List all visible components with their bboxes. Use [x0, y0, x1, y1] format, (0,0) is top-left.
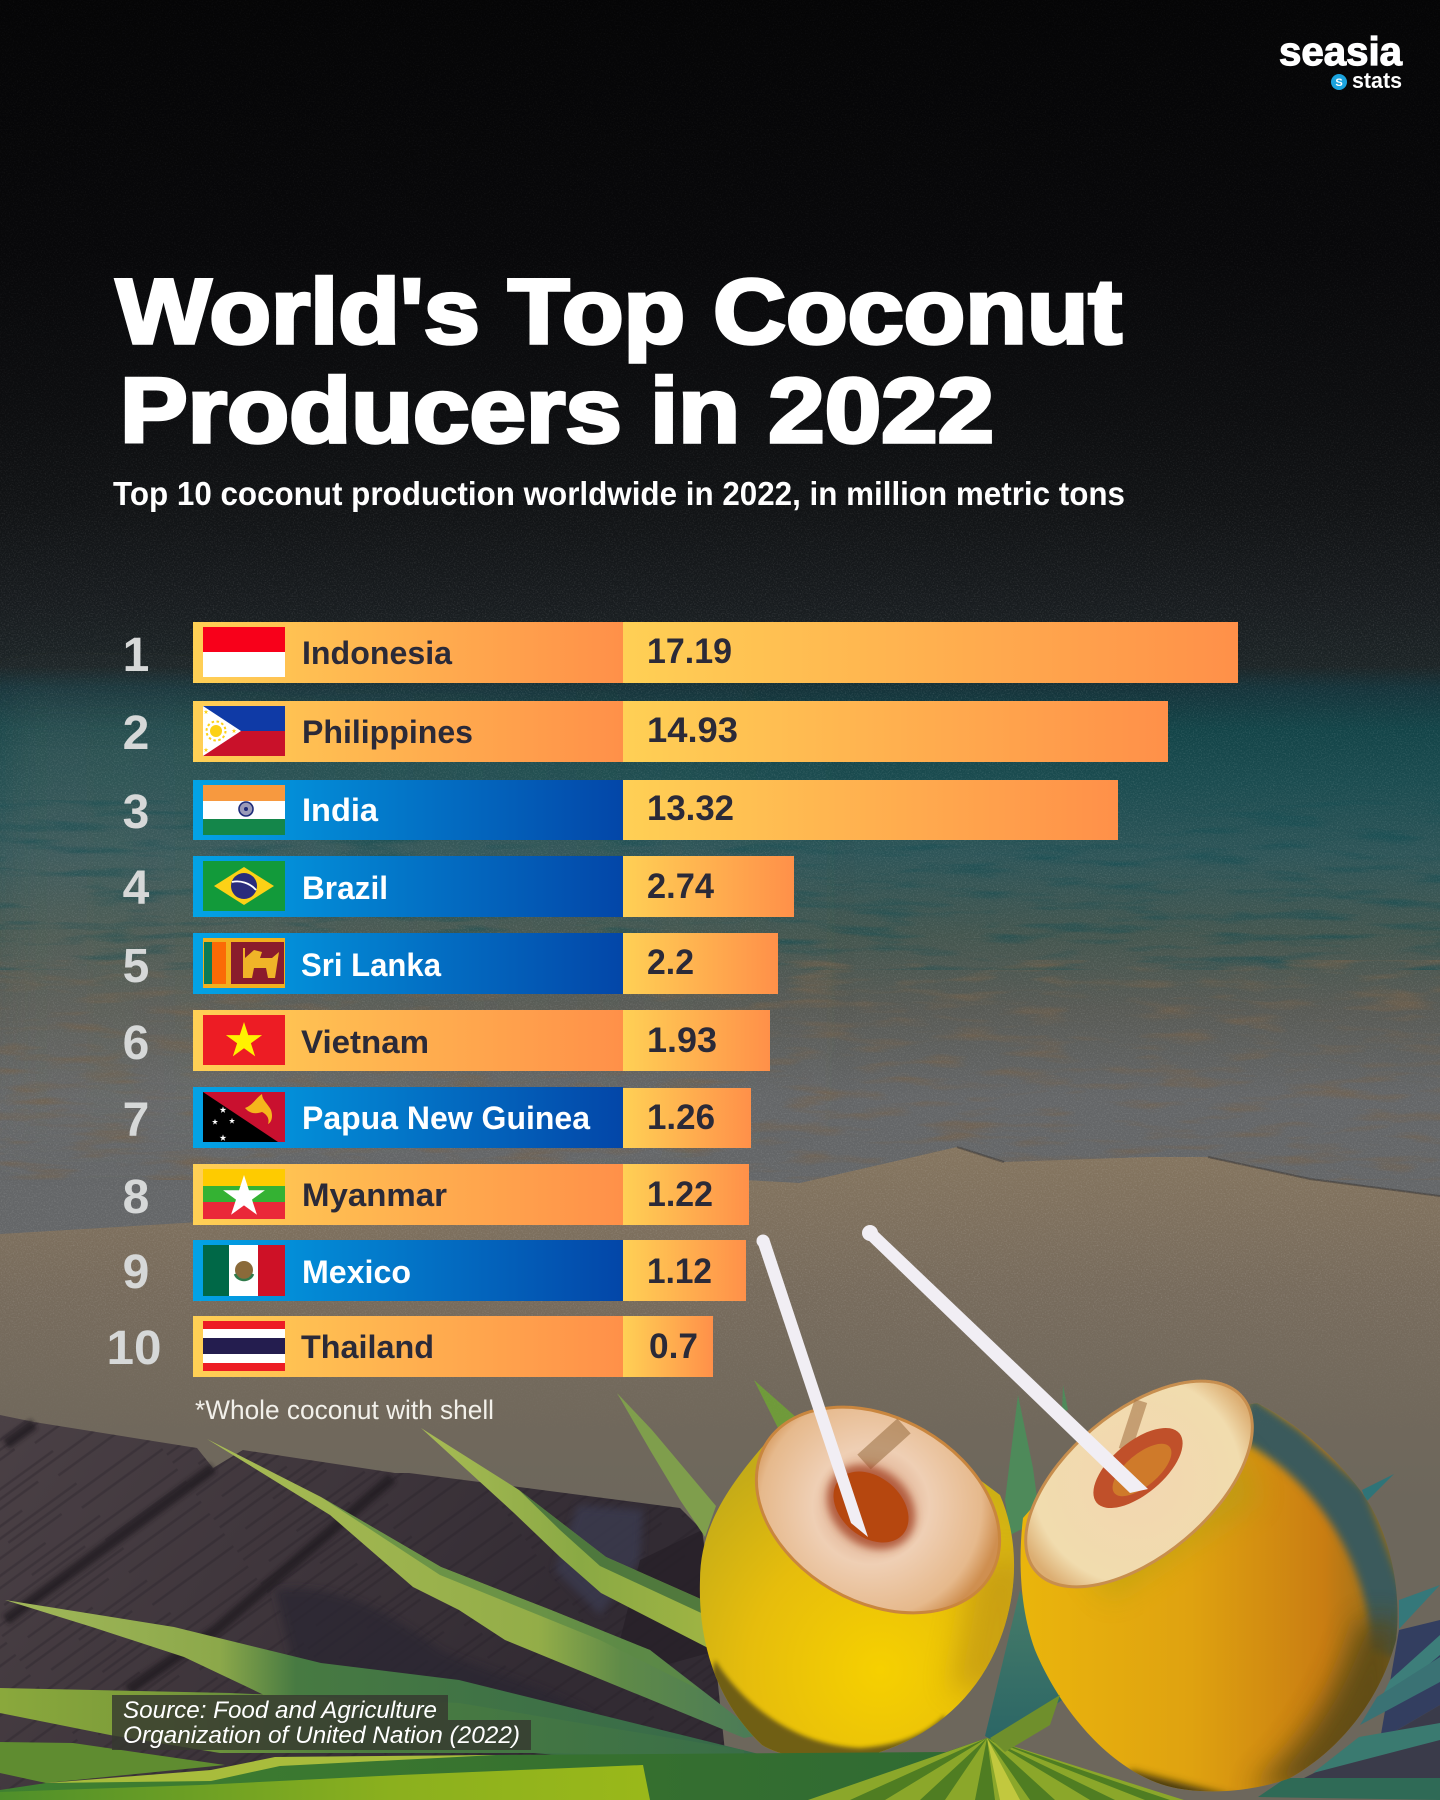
row 7: Papua New Guinea: 1.26	[647, 1098, 715, 1137]
logo: seasia stats: seasia	[1279, 30, 1403, 74]
straw: left	[756, 1234, 868, 1537]
row 5: Sri Lanka: 5	[123, 940, 149, 993]
row 4: Brazil: 4	[123, 862, 150, 915]
coconut husk: left	[700, 1420, 1014, 1760]
row 3: India	[123, 780, 1118, 840]
title	[116, 261, 1122, 462]
row 2: Philippines: 2	[123, 707, 149, 760]
row 8: Myanmar	[123, 1164, 749, 1225]
row 7: Papua New Guinea	[123, 1087, 751, 1148]
row 5: Sri Lanka	[123, 933, 778, 994]
flag: Sri Lanka	[203, 938, 285, 988]
flag: India	[203, 785, 285, 835]
logo: seasia stats	[1279, 30, 1403, 93]
logo: seasia stats: S	[1335, 77, 1343, 89]
row 3: India: India	[302, 792, 378, 828]
row 9: Mexico	[123, 1240, 746, 1301]
subtitle: Top 10 coconut production worldwide in 2022, in million metric tons	[113, 475, 1125, 512]
source note	[112, 1695, 531, 1750]
row 7: Papua New Guinea: Papua New Guinea	[302, 1100, 590, 1136]
row 10: Thailand	[106, 1316, 713, 1377]
row 9: Mexico: 1.12	[647, 1252, 712, 1291]
row 7: Papua New Guinea: 7	[123, 1094, 149, 1147]
row 3: India: 13.32	[647, 789, 734, 828]
right coconut	[1020, 1380, 1398, 1792]
flag: Brazil	[203, 861, 285, 911]
row 8: Myanmar: Myanmar	[302, 1177, 447, 1213]
row 6: Vietnam: 6	[123, 1017, 149, 1070]
palm leaves in front	[0, 1600, 1184, 1800]
row 3: India: 3	[123, 786, 149, 839]
coconut husk: right	[1021, 1403, 1398, 1791]
row 1: Indonesia: 17.19	[647, 632, 732, 671]
row 2: Philippines: 14.93	[647, 711, 738, 750]
row 6: Vietnam: 1.93	[647, 1021, 717, 1060]
row 2: Philippines: Philippines	[302, 714, 473, 750]
flag: Papua New Guinea	[203, 1092, 285, 1142]
row 4: Brazil: 2.74	[647, 867, 715, 906]
row 5: Sri Lanka: Sri Lanka	[301, 947, 441, 983]
coconut cut top: left	[719, 1365, 1037, 1655]
flag: Vietnam	[203, 1015, 285, 1065]
row 1: Indonesia: Indonesia	[302, 635, 452, 671]
source note: Organization of United Nation (2022)	[123, 1722, 520, 1749]
row 2: Philippines	[123, 701, 1168, 762]
coconut cut top: right	[989, 1342, 1289, 1626]
row 6: Vietnam	[123, 1010, 770, 1071]
row 1: Indonesia	[123, 622, 1238, 683]
flag: Myanmar	[203, 1169, 285, 1219]
row 9: Mexico: Mexico	[302, 1254, 411, 1290]
palm leaves behind the coconuts	[207, 1380, 1440, 1800]
bar chart: top 10 producers	[106, 622, 1238, 1377]
coconut hole: left	[820, 1457, 922, 1557]
flag: Indonesia	[203, 627, 285, 677]
grain overlay	[0, 0, 1440, 1440]
flag: Thailand	[203, 1321, 285, 1371]
source note: Source: Food and Agriculture	[123, 1697, 437, 1724]
flag: Mexico	[203, 1245, 285, 1296]
flag: Philippines	[203, 706, 285, 756]
title: World's Top Coconut	[116, 261, 1122, 363]
row 5: Sri Lanka: 2.2	[647, 943, 694, 982]
palm fan	[808, 1695, 1184, 1800]
logo: seasia stats: stats	[1352, 68, 1402, 93]
straw: right	[862, 1225, 1148, 1493]
row 1: Indonesia: 1	[123, 629, 149, 682]
row 8: Myanmar: 1.22	[647, 1175, 713, 1214]
row 8: Myanmar: 8	[123, 1171, 149, 1224]
row 10: Thailand: 0.7	[649, 1327, 698, 1366]
row 10: Thailand: 10	[106, 1322, 162, 1375]
title: Producers in 2022	[120, 360, 994, 462]
left coconut	[700, 1406, 1014, 1754]
row 4: Brazil	[123, 856, 794, 917]
wooden deck	[0, 1415, 1440, 1800]
row 4: Brazil: Brazil	[302, 870, 388, 906]
footnote: *Whole coconut with shell	[195, 1395, 494, 1425]
coconut hole: right	[1080, 1413, 1196, 1523]
row 10: Thailand: Thailand	[301, 1329, 434, 1365]
row 9: Mexico: 9	[123, 1246, 149, 1299]
row 6: Vietnam: Vietnam	[301, 1024, 429, 1060]
